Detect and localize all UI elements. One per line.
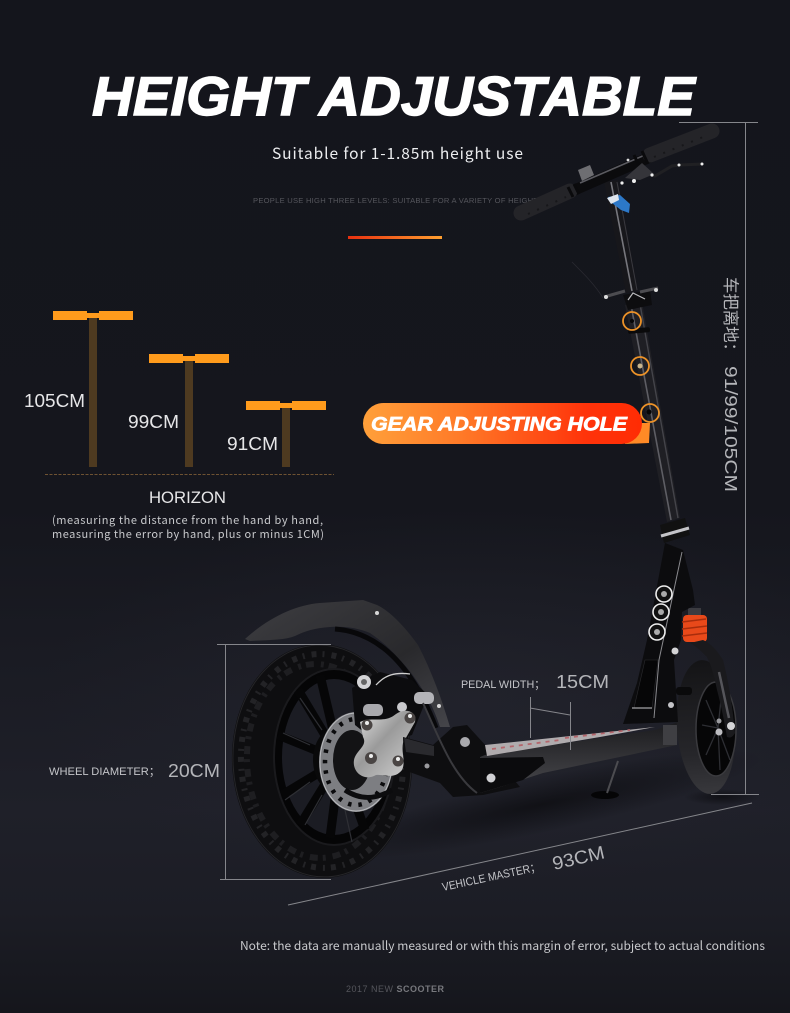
accent rule	[348, 236, 442, 239]
callout: gear adjusting hole	[363, 403, 650, 444]
horizon label: HORIZON	[149, 489, 226, 507]
measurement note	[52, 512, 324, 542]
rear swing arm	[403, 703, 520, 797]
silver mounting plate	[354, 711, 416, 777]
label: 91cm: 91CM	[227, 433, 278, 454]
dimension: pedal width: PEDAL WIDTH；	[461, 679, 545, 691]
rear wheel	[226, 639, 418, 883]
dimension: pedal width	[461, 671, 609, 750]
scooter illustration	[226, 131, 760, 883]
dimension: pedal width: 15CM	[556, 671, 609, 692]
folding clamp	[604, 288, 658, 310]
height label vertical	[720, 277, 744, 492]
callout: gear adjusting hole: GEAR ADJUSTING HOLE	[371, 414, 628, 436]
brake disc	[319, 712, 393, 812]
brake caliper	[352, 672, 434, 745]
height label vertical: 车把离地：	[720, 277, 744, 359]
label: 105cm: 105CM	[24, 390, 85, 411]
dimension: vehicle length	[288, 803, 752, 905]
footer brand: 2017 NEW SCOOTER	[346, 984, 444, 994]
front wheel	[672, 658, 760, 805]
label: 99cm: 99CM	[128, 411, 179, 432]
thin brake cable	[572, 262, 603, 298]
bar: 99cm handle	[149, 354, 229, 467]
dimension: wheel diameter: 20CM	[168, 760, 220, 781]
height label vertical: 91/99/105CM	[721, 366, 741, 492]
title: HEIGHT ADJUSTABLE	[92, 65, 697, 127]
sticker badges	[649, 586, 672, 640]
dimension: wheel diameter: WHEEL DIAMETER；	[49, 766, 160, 778]
dimension: overall height	[679, 122, 759, 795]
dimension: vehicle length: VEHICLE MASTER；	[441, 861, 541, 894]
front fork	[690, 640, 735, 738]
dimension: wheel diameter	[49, 644, 331, 880]
brake cable clip	[607, 194, 630, 213]
handlebar	[521, 131, 712, 214]
subtitle: Suitable for 1-1.85m height use	[272, 142, 523, 164]
small caption: PEOPLE USE HIGH THREE LEVELS: SUITABLE FOR A VARIETY OF HEIGHT	[253, 196, 538, 205]
rear fender	[245, 600, 450, 728]
deck	[480, 722, 678, 793]
frame head plate	[623, 543, 695, 724]
horizon line	[45, 474, 334, 476]
bar: 105cm handle	[53, 311, 133, 467]
panel: handle height chart	[24, 311, 334, 542]
front suspension spring	[682, 608, 707, 642]
measurement note: (measuring the distance from the hand by hand,	[52, 512, 323, 528]
bar: 91cm handle	[246, 401, 326, 467]
adjustment holes	[623, 312, 659, 422]
steering upper tube	[604, 180, 638, 293]
footnote: Note: the data are manually measured or with this margin of error, subject to actual conditions	[240, 937, 765, 954]
dimension: vehicle length: 93CM	[550, 842, 607, 874]
kick stand	[591, 761, 619, 799]
measurement note: measuring the error by hand, plus or minus 1CM)	[52, 526, 324, 542]
steering lower tube	[625, 302, 690, 543]
